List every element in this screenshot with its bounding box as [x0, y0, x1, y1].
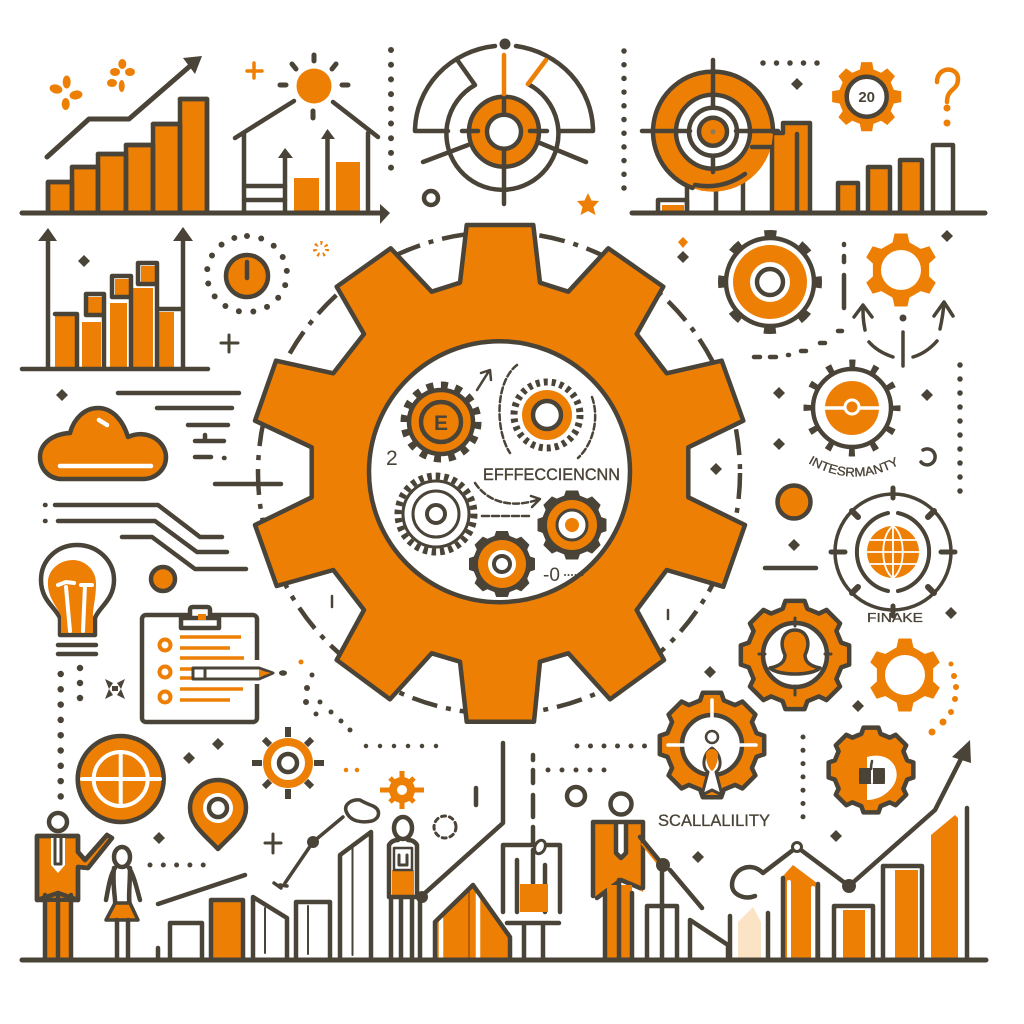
lollipop marks	[332, 596, 668, 619]
diamonds	[153, 738, 842, 863]
checklist	[160, 637, 244, 702]
gear: person	[741, 601, 849, 709]
short t-line	[215, 482, 281, 486]
chart: left bars with two arrows	[22, 227, 208, 369]
inner bars	[278, 129, 360, 213]
axis	[632, 210, 985, 216]
plus	[265, 834, 281, 853]
icon: plus	[247, 63, 262, 78]
diamond	[56, 389, 68, 401]
icon: clock with dotted ring	[207, 236, 287, 312]
gear: scalability right	[829, 728, 913, 812]
icon: small ring	[424, 191, 438, 205]
icon: small orange burst	[315, 243, 327, 255]
dashed arcs around gear 2	[500, 365, 595, 458]
tick	[474, 788, 478, 805]
chart: house with sun	[235, 55, 378, 213]
chart: rising bars with arrow	[47, 56, 207, 213]
icon: star	[577, 193, 599, 215]
number 2: 2	[386, 447, 398, 470]
chart: top-right target with bars	[632, 60, 985, 213]
dotted line	[388, 50, 394, 168]
plus	[221, 335, 238, 352]
dotted row	[366, 744, 440, 748]
circle	[778, 486, 810, 518]
dotted row	[763, 60, 818, 66]
dotted line	[621, 51, 627, 188]
dotted line	[957, 365, 963, 505]
sun	[280, 55, 348, 118]
diamond	[78, 255, 90, 267]
inner gear 4	[538, 491, 606, 559]
gear: orange with dots	[870, 639, 959, 736]
circuit lines	[45, 505, 246, 569]
figure: easel	[503, 827, 560, 960]
icon: wrench-like tool	[274, 800, 379, 888]
gear: finance globe	[831, 488, 955, 616]
gear: integrity	[808, 364, 896, 452]
centre hole	[369, 341, 630, 602]
baseline	[22, 958, 986, 962]
icon: semicircular target	[415, 38, 593, 204]
lines	[22, 236, 208, 369]
orange ticks	[504, 55, 546, 94]
text lines	[118, 393, 239, 458]
flowers	[49, 59, 135, 110]
diamond	[791, 78, 803, 90]
inner gear 1: E	[434, 412, 448, 435]
divider	[765, 566, 816, 570]
dotted columns	[61, 668, 80, 797]
figure: person with apron	[389, 817, 417, 960]
icon: clipboard with pencil	[142, 607, 273, 722]
wedge	[690, 920, 728, 960]
gear: upper right	[722, 234, 818, 330]
dot near pencil	[279, 670, 287, 676]
gear: scalability person	[660, 693, 764, 797]
dotted tail	[565, 574, 584, 576]
icon: light bulb	[41, 545, 114, 654]
main gear	[255, 225, 745, 722]
gear: dark spokes	[252, 727, 324, 799]
icon: round crosshair	[78, 736, 164, 822]
inner gear 2	[514, 382, 580, 448]
clip	[181, 607, 219, 628]
label: integrity: INTESRMANTY	[808, 456, 896, 477]
orange dot	[298, 660, 304, 664]
question mark	[937, 70, 958, 126]
number 0: -0	[543, 565, 560, 586]
icon: small orange gear	[380, 771, 424, 809]
inner gear 5	[469, 531, 535, 597]
trend line	[732, 740, 971, 897]
dashed ring	[258, 232, 740, 714]
bars	[48, 99, 207, 213]
arcs and radial lines	[415, 46, 593, 204]
label: finance: FINAKE	[867, 610, 923, 625]
small arrow	[477, 370, 491, 390]
bar outlines and axis for top-left chart	[22, 99, 390, 224]
target	[642, 60, 778, 192]
arrowheads	[38, 227, 193, 241]
long connector	[416, 743, 503, 960]
pale bar	[738, 907, 761, 958]
icon: map pin	[190, 780, 246, 849]
small four-arrow icon	[105, 679, 125, 699]
figure: man with pointer	[593, 794, 702, 960]
dashed circle	[434, 816, 456, 838]
building: orange house	[435, 885, 510, 960]
inner gear 3	[398, 476, 474, 552]
gear labelled 20	[832, 62, 901, 131]
dashes and dots	[533, 737, 803, 830]
c-shaped icon	[921, 449, 935, 465]
orange dots	[346, 768, 358, 772]
label: scalability: SCALLALILITY	[658, 811, 770, 830]
top dot	[500, 38, 510, 50]
orange bars	[55, 266, 174, 368]
house outline	[235, 101, 378, 213]
arrows under orange gear	[854, 302, 953, 366]
gear body	[255, 225, 745, 722]
trend arrow	[47, 56, 202, 157]
pencil	[193, 660, 273, 684]
figure: man presenting	[37, 813, 112, 960]
hub	[487, 115, 521, 149]
slanted line	[158, 875, 245, 904]
right-side diamonds	[677, 230, 957, 712]
bar posts	[730, 913, 768, 960]
chart: right bars and trend	[732, 740, 971, 960]
label: efficiency: EFFFECCIENCNN	[483, 465, 620, 484]
orange ring	[469, 97, 539, 167]
bars	[782, 808, 967, 960]
inner gear 1	[404, 385, 478, 459]
gear labelled 20: 20	[858, 89, 875, 106]
small orange circle	[151, 567, 175, 591]
dotted row	[150, 862, 204, 868]
dashed arrows between gears	[475, 483, 540, 516]
dashes	[842, 244, 846, 308]
bottom-left buildings	[158, 832, 371, 960]
dotted path	[303, 672, 352, 732]
bars	[658, 123, 953, 213]
gear: plain orange	[866, 234, 936, 306]
figure: woman	[106, 847, 140, 960]
dashed curve	[754, 331, 842, 357]
icon: cloud	[40, 408, 166, 479]
